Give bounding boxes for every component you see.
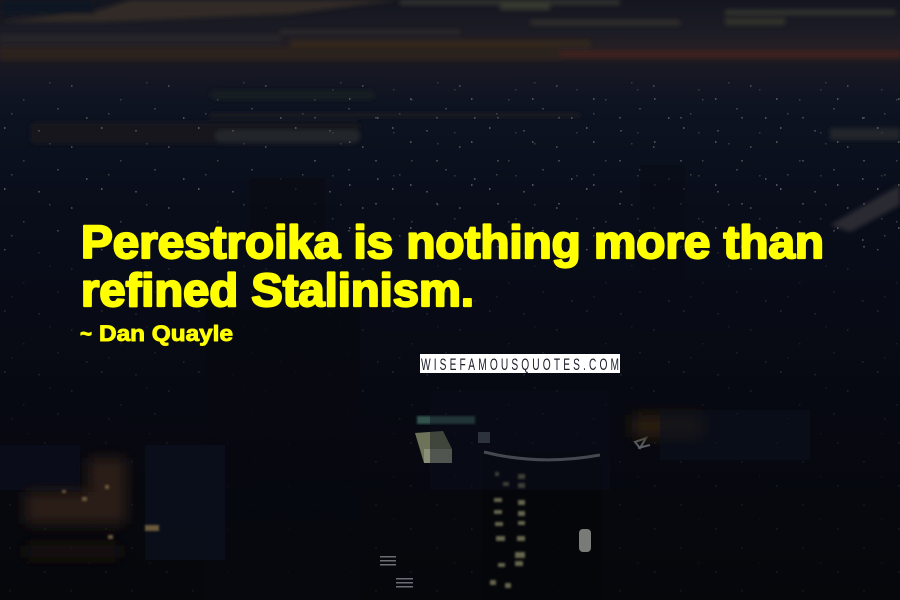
logo: WiseFamousQuotes.com: WISEFAMOUSQUOTES.COM [421, 354, 619, 374]
sky: sunset clouds [0, 0, 900, 60]
quote text [81, 216, 824, 316]
dark towers [0, 165, 685, 600]
curved tower with windows [482, 452, 602, 600]
ground: water and land [30, 90, 900, 232]
city lights [0, 80, 900, 250]
attribution: Dan Quayle [99, 321, 233, 346]
quote line 1: Perestroika is nothing more than [81, 216, 824, 268]
lit roof block [415, 416, 475, 463]
quote line 2: refined Stalinism. [81, 264, 474, 316]
right side details [380, 390, 810, 588]
bottom-left lit building [25, 458, 159, 558]
attribution: ~ [80, 321, 92, 346]
